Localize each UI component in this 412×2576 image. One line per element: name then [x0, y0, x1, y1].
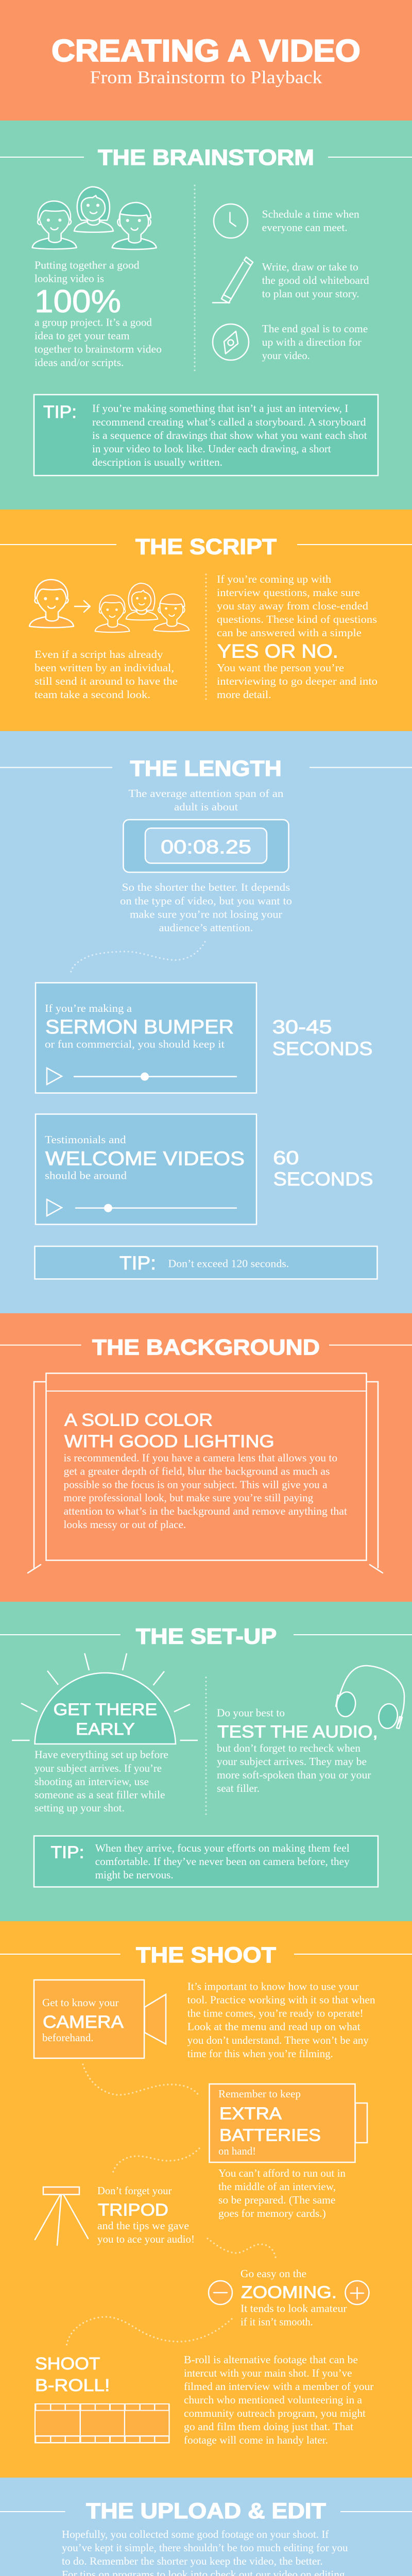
icon: stopwatch timer: 00:08.25	[161, 836, 251, 857]
text block: b-roll: intercut with your main shot. If you’ve	[184, 2367, 352, 2379]
text block: solid color: get a greater depth of field, blur the background as much as	[64, 1465, 330, 1478]
text block: interview questions	[217, 573, 377, 701]
panel: the brainstorm	[0, 121, 412, 510]
subtitle: From Brainstorm to Playback	[90, 67, 322, 88]
text block: schedule: everyone can meet.	[262, 221, 348, 233]
text block: zooming: It tends to look amateur	[241, 2302, 347, 2315]
heading: shoot b-roll: SHOOT	[35, 2354, 100, 2373]
text block: shorter the better: audience’s attention.	[159, 921, 253, 934]
text block: test the audio: seat filler.	[217, 1782, 260, 1794]
text block: solid color: possible so the focus is on your subject. This will give you a	[64, 1479, 328, 1491]
text block: shorter the better	[120, 881, 292, 934]
text block: group project: together to brainstorm video	[35, 343, 162, 355]
icon: film strip	[35, 2403, 170, 2443]
text block: second look: team take a second look.	[35, 688, 150, 701]
title: CREATING A VIDEO	[52, 33, 360, 68]
card: welcome videos	[36, 1114, 256, 1224]
stat: 30-45 seconds: SECONDS	[272, 1038, 373, 1059]
icon: camera with label: CAMERA	[43, 2012, 124, 2032]
callout: tip storyboard: If you’re making something that isn’t a just an interview, I	[92, 402, 348, 415]
callout: tip storyboard: is a sequence of drawings that show what you want each shot	[92, 429, 367, 442]
text block: schedule: Schedule a time when	[262, 208, 359, 220]
callout: tip exceed	[35, 1246, 377, 1279]
text block: run out: the middle of an interview,	[218, 2180, 336, 2193]
text block: interview questions: If you’re coming up with	[217, 573, 332, 585]
text block: group project: a group project. It’s a good	[35, 316, 152, 329]
text block: set up early: your subject arrives. If you’re	[35, 1762, 162, 1774]
text block: shorter the better: on the type of video, but you want to	[120, 894, 292, 907]
text block: zooming: if it isn’t smooth.	[241, 2316, 313, 2328]
text block: run out: so be prepared. (The same	[218, 2194, 336, 2206]
icon: zoom out	[209, 2281, 232, 2304]
text block: set up early: someone as a seat filler while	[35, 1789, 165, 1801]
text block: intro: you’ve kept it simple, there shouldn’t be too much editing for you	[62, 2541, 348, 2554]
icon: battery with label	[209, 2084, 367, 2162]
text block: interview questions: more detail.	[217, 688, 271, 701]
stat: 30-45 seconds: 30-45	[272, 1016, 332, 1038]
heading: the upload and edit: THE UPLOAD & EDIT	[86, 2499, 326, 2523]
text block: group project: Putting together a good	[35, 259, 140, 272]
text block: attention span: The average attention span of an	[129, 787, 284, 800]
text block: interview questions: can be answered with a simple	[217, 626, 362, 639]
text block: b-roll: filmed an interview with a member of your	[184, 2380, 373, 2393]
text block: second look: been written by an individual,	[35, 662, 174, 674]
heading: the script: THE SCRIPT	[135, 535, 277, 560]
callout: tip storyboard	[34, 395, 378, 476]
text block: know your tool: It’s important to know how to use your	[187, 1980, 358, 1993]
text block: write and draw: the good old whiteboard	[262, 274, 369, 286]
panel: the shoot	[0, 1921, 412, 2478]
text block: zooming: ZOOMING.	[241, 2283, 337, 2302]
text block: interview questions: YES OR NO.	[217, 641, 338, 662]
text block: know your tool: Look at the menu and read up on what	[187, 2021, 360, 2033]
text block: solid color: looks messy or out of place.	[64, 1518, 186, 1531]
icon: rising sun: GET THERE	[54, 1700, 157, 1719]
icon: camera with label: beforehand.	[42, 2031, 94, 2044]
text block: test the audio: Do your best to	[217, 1707, 285, 1719]
text block: test the audio: more soft-spoken than you or your	[217, 1769, 371, 1781]
text block: run out	[218, 2167, 346, 2219]
callout: tip comfortable	[34, 1836, 378, 1887]
card: sermon bumper	[36, 983, 256, 1093]
callout: tip storyboard: recommend creating what’s called a storyboard. A storyboard	[92, 416, 366, 428]
card: welcome videos: should be around	[45, 1170, 127, 1182]
icon: battery with label: on hand!	[218, 2145, 256, 2157]
text block: intro	[62, 2528, 348, 2576]
text block: test the audio	[217, 1707, 378, 1794]
callout: tip storyboard: TIP:	[43, 402, 77, 422]
text block: run out: You can’t afford to run out in	[218, 2167, 346, 2179]
text block: second look: still send it around to have the	[35, 675, 178, 687]
card: sermon bumper: SERMON BUMPER	[45, 1016, 234, 1038]
text block: set up early: Have everything set up before	[35, 1749, 168, 1761]
panel: title header	[0, 0, 412, 121]
icon: headphones	[335, 1666, 404, 1730]
panel: the upload and edit	[0, 2478, 412, 2576]
icon: three people	[32, 187, 157, 249]
callout: tip exceed: Don’t exceed 120 seconds.	[168, 1257, 289, 1269]
text block: set up early	[35, 1749, 168, 1814]
icon: tripod	[35, 2187, 88, 2245]
text block: interview questions: you stay away from close-ended	[217, 600, 369, 612]
text block: test the audio: but don’t forget to recheck when	[217, 1742, 360, 1754]
text block: solid color: attention to what’s in the background and remove anything that	[64, 1505, 347, 1517]
text block: attention span	[129, 787, 284, 813]
text block: know your tool	[187, 1980, 375, 2060]
heading: the background: THE BACKGROUND	[92, 1335, 320, 1360]
icon: rising sun	[12, 1653, 198, 1744]
text block: solid color: A SOLID COLOR	[64, 1411, 213, 1430]
panel: the length	[0, 731, 412, 1313]
panel: the background	[0, 1313, 412, 1602]
icon: camera with label: Get to know your	[42, 1996, 118, 2009]
text block: b-roll	[184, 2353, 373, 2446]
icon: zoom in	[345, 2281, 369, 2304]
text block: schedule	[262, 208, 359, 233]
text block: group project: 100%	[35, 284, 121, 319]
callout: tip comfortable: When they arrive, focus your efforts on making them feel	[95, 1842, 350, 1854]
text block: tripod: and the tips we gave	[97, 2219, 189, 2232]
stat: 30-45 seconds	[272, 1016, 373, 1059]
icon: one person passes script to team	[29, 580, 189, 632]
text block: tripod: you to ace your audio!	[97, 2233, 195, 2245]
text block: interview questions: You want the person you’re	[217, 662, 344, 674]
text block: group project: ideas and/or scripts.	[35, 357, 124, 369]
icon: battery with label: BATTERIES	[219, 2125, 321, 2144]
icon: camera with label	[34, 1980, 166, 2058]
text block: end goal: The end goal is to come	[262, 323, 368, 335]
text block: b-roll: B-roll is alternative footage that can be	[184, 2353, 358, 2366]
icon: battery with label: Remember to keep	[218, 2088, 301, 2100]
text block: set up early: shooting an interview, use	[35, 1775, 149, 1788]
stat: 60 seconds	[273, 1147, 373, 1190]
text block: b-roll: church who mentioned volunteering in a	[184, 2394, 363, 2406]
heading: the shoot: THE SHOOT	[136, 1943, 276, 1968]
text block: end goal: up with a direction for	[262, 336, 362, 348]
panel: the script	[0, 510, 412, 731]
text block: tripod	[97, 2184, 195, 2245]
icon: compass	[213, 324, 249, 360]
text block: know your tool: you don’t understand. There won’t be any	[187, 2034, 369, 2046]
text block: set up early: setting up your shot.	[35, 1802, 125, 1814]
text block: test the audio: your subject arrives. They may be	[217, 1755, 367, 1768]
icon: marker	[213, 257, 253, 303]
text block: second look	[35, 648, 178, 701]
text block: write and draw: Write, draw or take to	[262, 261, 358, 273]
text block: tripod: TRIPOD	[98, 2200, 168, 2219]
text block: solid color: is recommended. If you have a camera lens that allows you to	[64, 1451, 337, 1464]
icon: rising sun: EARLY	[76, 1720, 135, 1738]
text block: interview questions: interviewing to go deeper and into	[217, 675, 377, 687]
text block: interview questions: questions. These kind of questions	[217, 613, 377, 625]
icon: play bar	[47, 1068, 236, 1084]
card: sermon bumper: or fun commercial, you should keep it	[45, 1038, 225, 1050]
stat: 60 seconds: 60	[273, 1147, 299, 1168]
text block: write and draw	[262, 261, 369, 300]
callout: tip comfortable: might be nervous.	[95, 1869, 174, 1881]
text block: zooming	[241, 2267, 347, 2328]
text block: intro: to do. Remember the shorter you keep the video, the better.	[62, 2555, 323, 2567]
text block: group project: looking video is	[35, 273, 104, 285]
text block: solid color	[64, 1411, 347, 1531]
callout: tip comfortable: comfortable. If they’ve never been on camera before, they	[95, 1855, 350, 1868]
callout: tip comfortable: TIP:	[50, 1842, 84, 1862]
text block: group project: idea to get your team	[35, 330, 130, 342]
text block: run out: goes for memory cards.)	[218, 2207, 326, 2219]
heading: the brainstorm: THE BRAINSTORM	[98, 145, 314, 170]
text block: know your tool: the time comes, you’re ready to operate!	[187, 2007, 364, 2020]
text block: b-roll: go and film them doing just that. That	[184, 2420, 353, 2433]
heading: the length: THE LENGTH	[130, 756, 282, 781]
text block: shorter the better: make sure you’re not losing your	[130, 908, 282, 920]
text block: intro: Hopefully, you collected some good footage on your shoot. If	[62, 2528, 329, 2540]
panel: the set-up	[0, 1602, 412, 1921]
callout: tip exceed: TIP:	[119, 1252, 156, 1274]
text block: b-roll: community outreach program, you might	[184, 2407, 366, 2419]
card: welcome videos: Testimonials and	[45, 1133, 126, 1146]
card: sermon bumper: If you’re making a	[45, 1002, 132, 1014]
text block: end goal	[262, 323, 368, 362]
text block: zooming: Go easy on the	[241, 2267, 306, 2280]
text block: solid color: more professional look, but make sure you’re still paying	[64, 1492, 314, 1504]
text block: know your tool: time for this when you’re filming.	[187, 2047, 333, 2060]
text block: b-roll: footage will come in handy later.	[184, 2434, 328, 2446]
card: welcome videos: WELCOME VIDEOS	[45, 1148, 245, 1170]
text block: tripod: Don’t forget your	[97, 2184, 171, 2197]
stat: 60 seconds: SECONDS	[273, 1168, 373, 1190]
heading: the set-up: THE SET-UP	[136, 1624, 277, 1649]
heading: shoot b-roll: B-ROLL!	[35, 2376, 110, 2395]
text block: solid color: WITH GOOD LIGHTING	[64, 1432, 274, 1451]
text block: attention span: adult is about	[174, 801, 238, 813]
text block: write and draw: to plan out your story.	[262, 287, 359, 300]
backdrop frame	[28, 1374, 383, 1573]
icon: battery with label: EXTRA	[219, 2104, 282, 2123]
icon: play bar	[47, 1199, 236, 1216]
text block: group project	[35, 259, 162, 369]
icon: stopwatch timer	[124, 820, 288, 872]
text block: know your tool: tool. Practice working with it so that when	[187, 1994, 375, 2006]
heading: shoot b-roll	[35, 2354, 110, 2395]
callout: tip storyboard: in your video to look like. Under each drawing, a short	[92, 443, 331, 455]
text block: test the audio: TEST THE AUDIO,	[217, 1723, 378, 1742]
text block: second look: Even if a script has already	[35, 648, 163, 660]
callout: tip storyboard: description is usually written.	[92, 456, 222, 468]
icon: clock	[214, 204, 248, 238]
text block: end goal: your video.	[262, 349, 310, 362]
text block: interview questions: interview questions, make sure	[217, 586, 360, 599]
text block: shorter the better: So the shorter the better. It depends	[122, 881, 290, 893]
